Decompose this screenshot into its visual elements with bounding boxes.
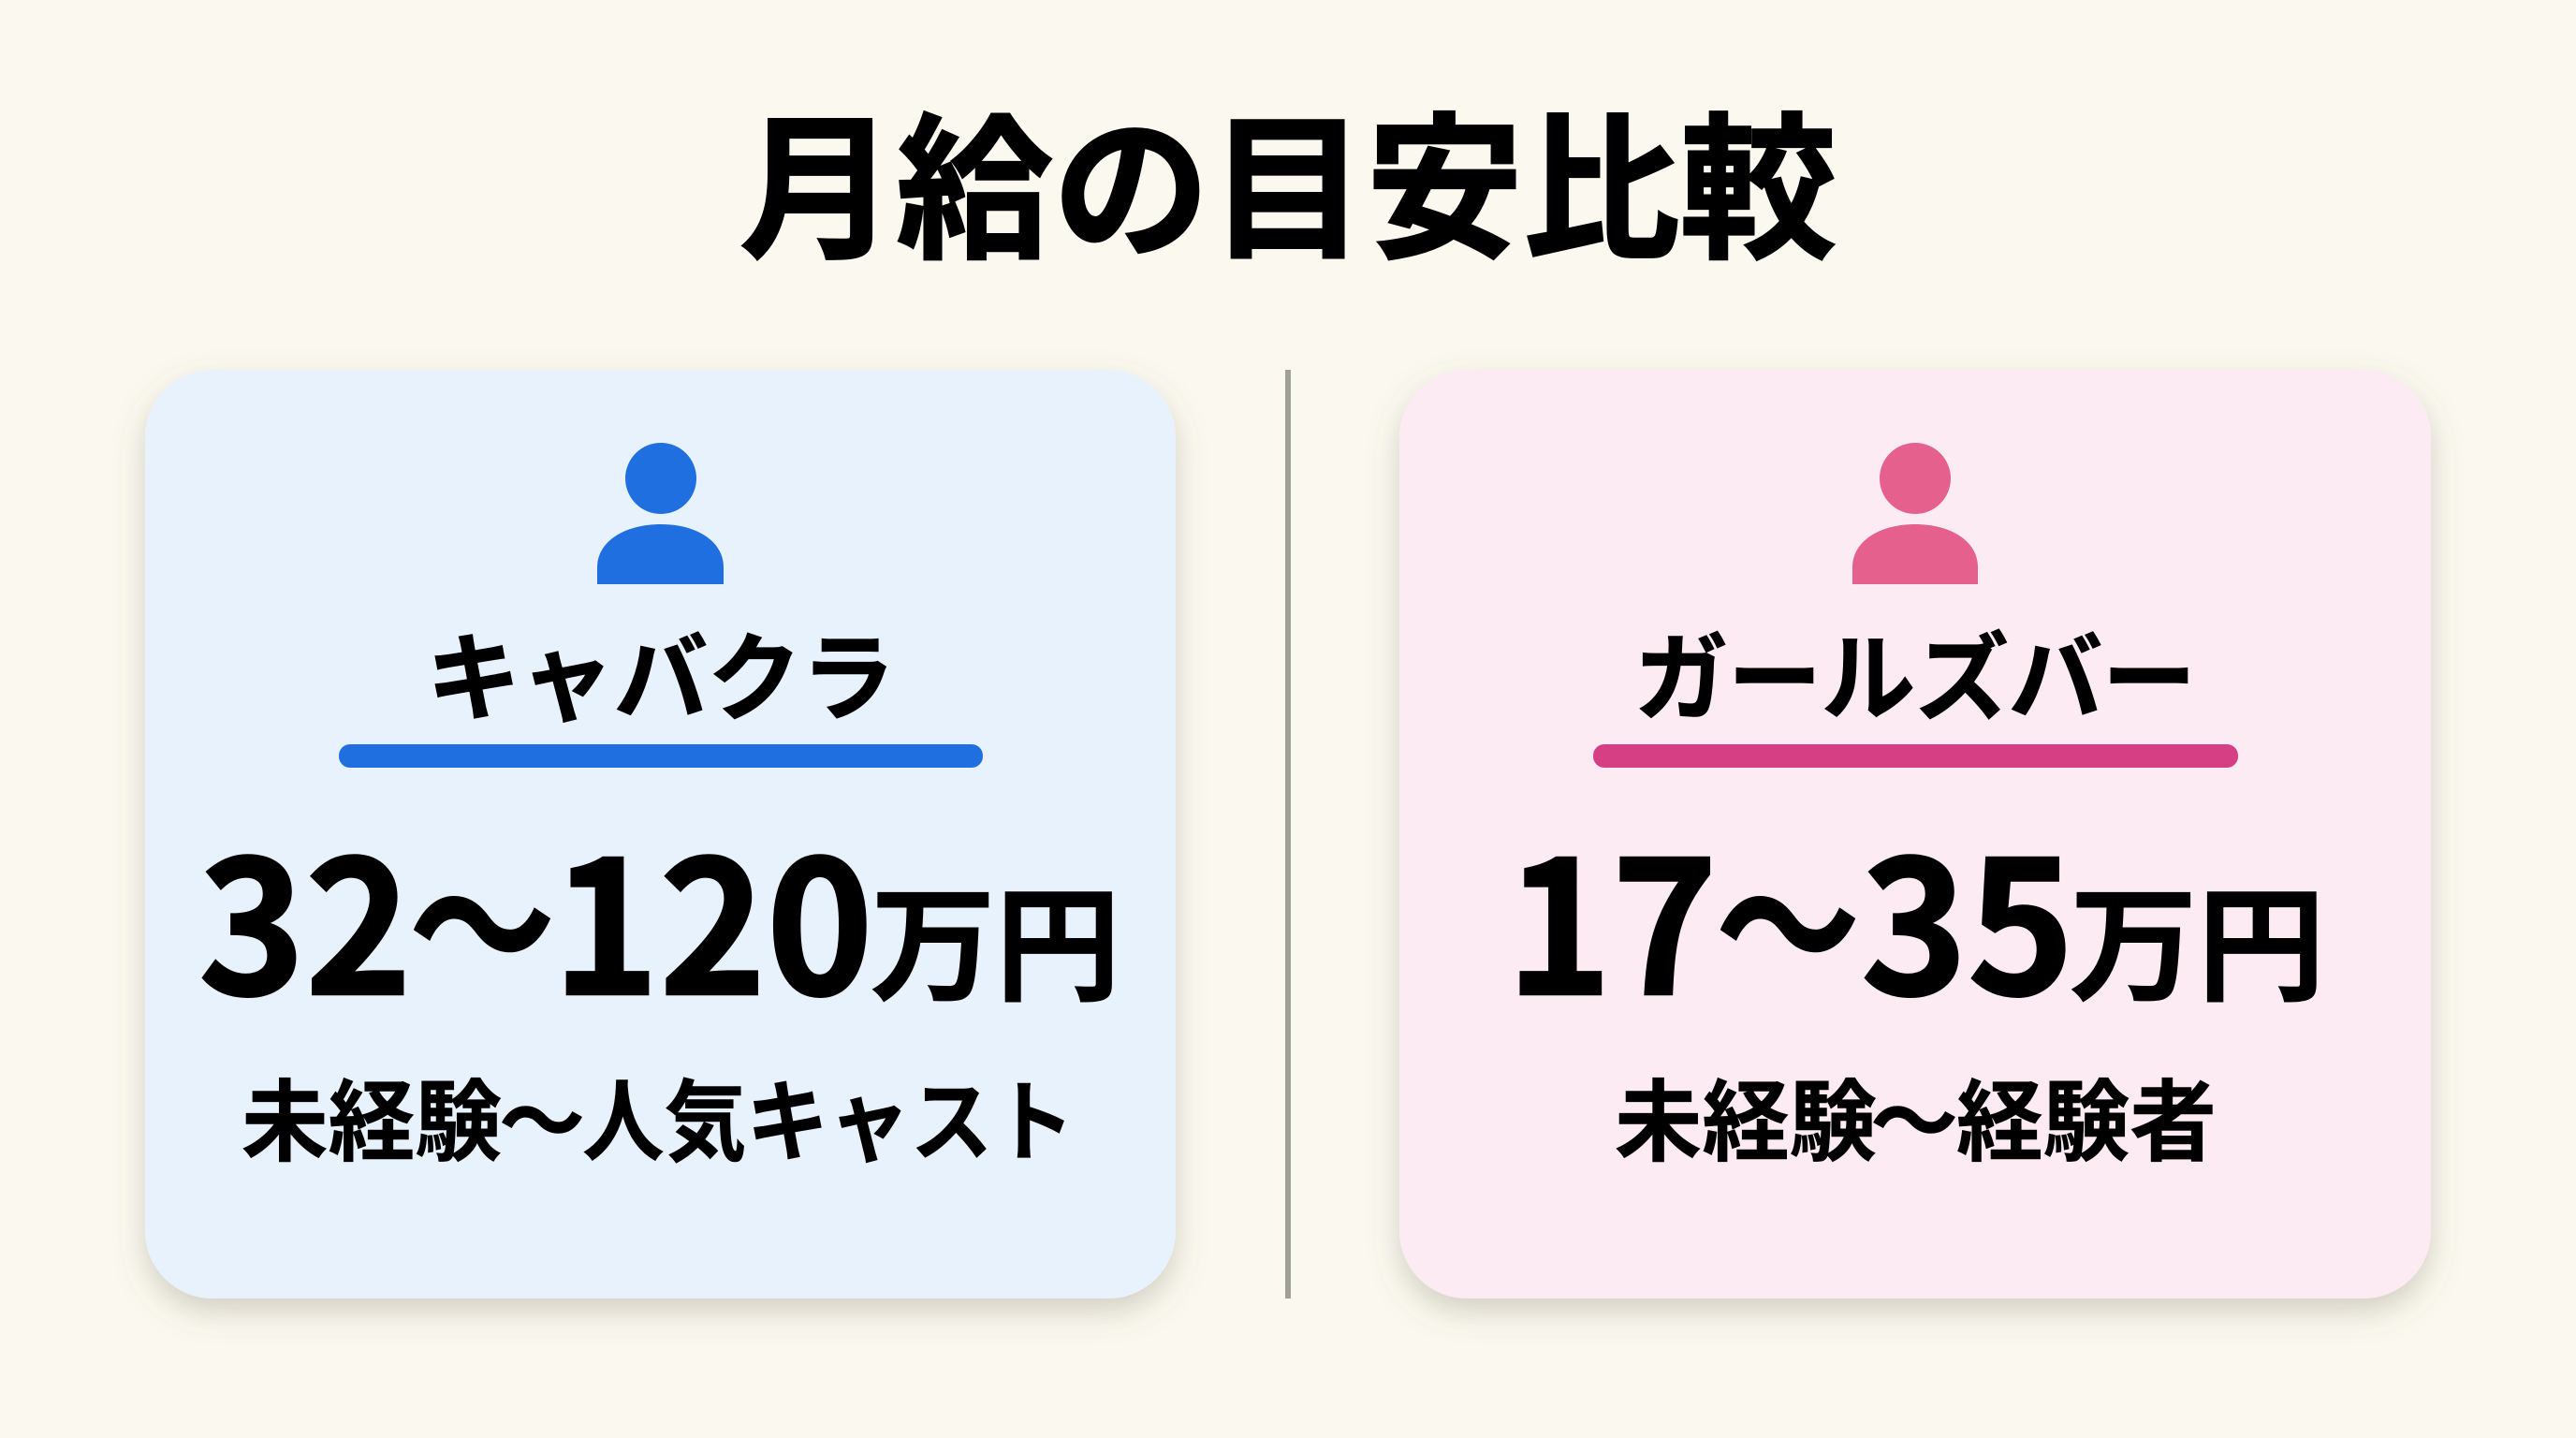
- experience note: 経験者: [1956, 1051, 2217, 1180]
- heading: ガールズバー: ガールズバー: [1634, 603, 2196, 741]
- center divider: [1285, 370, 1291, 1299]
- salary range: 120: [552, 780, 873, 1048]
- experience note: 未経験: [242, 1051, 502, 1180]
- experience note: [1615, 1051, 2217, 1180]
- salary range: 17: [1506, 780, 1718, 1048]
- salary range: 35: [1861, 780, 2074, 1048]
- experience note: 〜: [1870, 1051, 1958, 1180]
- experience note: [242, 1051, 1075, 1180]
- salary range: [1506, 780, 2325, 1048]
- underline blue: [339, 744, 983, 768]
- salary range: 万円: [871, 845, 1120, 1027]
- experience note: 人気キャスト: [582, 1051, 1075, 1180]
- panel: キャバクラ: [145, 370, 1176, 1299]
- salary range: 〜: [408, 780, 556, 1048]
- salary range: 〜: [1715, 780, 1861, 1048]
- icon: person blue: [597, 443, 724, 584]
- salary range: [198, 780, 1120, 1048]
- salary range: 32: [198, 780, 412, 1048]
- heading: キャバクラ: キャバクラ: [427, 603, 895, 741]
- experience note: 未経験: [1615, 1051, 1877, 1180]
- icon: person pink: [1852, 443, 1978, 584]
- title: 月給の目安比較: [739, 64, 1837, 291]
- panel: ガールズバー: [1399, 370, 2431, 1299]
- experience note: 〜: [499, 1051, 585, 1180]
- underline pink: [1593, 744, 2238, 768]
- salary range: 万円: [2070, 845, 2325, 1027]
